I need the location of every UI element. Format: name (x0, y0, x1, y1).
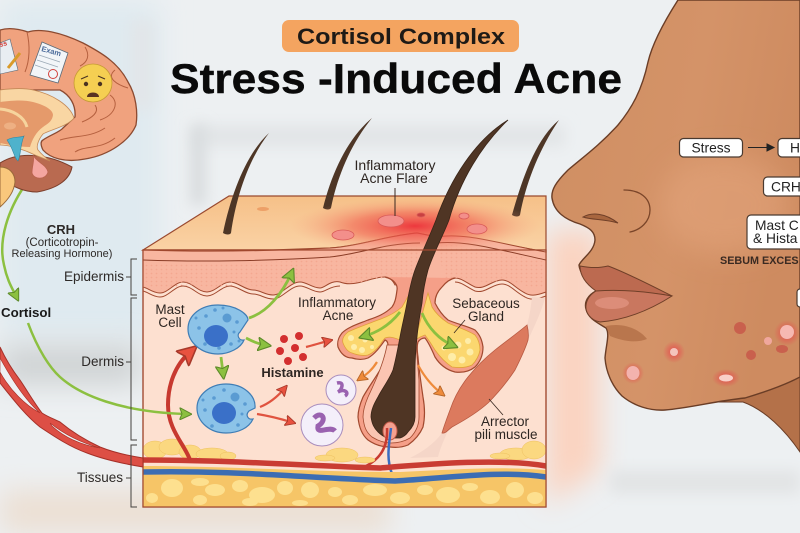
lips (580, 266, 672, 322)
follicle and sebaceous glands (338, 277, 483, 447)
blue vein (143, 472, 546, 481)
CRH label: CRH (47, 222, 75, 237)
cerebellum (0, 155, 72, 192)
arrector pili label: pili muscle (474, 427, 538, 442)
hair papilla and vessels (366, 422, 397, 474)
upper fat band (143, 439, 546, 463)
nostril (583, 214, 618, 223)
chin shadow (606, 325, 647, 341)
mast cell top (188, 305, 248, 354)
hypothalamus blue (7, 136, 24, 161)
mast cell bottom (197, 384, 255, 433)
side labels: Dermis (81, 354, 124, 369)
arrow: stress to next (748, 144, 774, 151)
epidermis layer (143, 233, 546, 295)
left gland fill (343, 293, 410, 355)
flare label: Inflammatory (355, 157, 435, 173)
gland lobules (348, 335, 474, 364)
muscle leader line (489, 399, 503, 415)
inflammatory acne label: Acne (323, 308, 353, 323)
stress box: Stress (691, 140, 731, 156)
face shape (552, 0, 800, 410)
side brackets (126, 259, 137, 507)
lower fat layer (143, 466, 546, 507)
branch vessel up to mast cell (168, 352, 190, 460)
dermal border second line (143, 282, 546, 299)
mast cell and histamine box: Mast C (755, 218, 799, 233)
flare label: Acne Flare (360, 170, 428, 186)
inner brain (0, 100, 53, 147)
muscle (410, 297, 545, 458)
face profile (552, 0, 800, 452)
worried face (74, 64, 112, 102)
subtitle pill (282, 20, 519, 52)
muscle belly (442, 325, 528, 433)
CRH label (12, 222, 112, 260)
cheek highlight (660, 155, 790, 255)
follicle sheath inner (363, 345, 419, 443)
stress box (680, 138, 742, 157)
neck shadow (700, 377, 800, 452)
arrector pili label (474, 414, 538, 442)
sebaceous gland label: Sebaceous (452, 296, 520, 311)
top face of skin (143, 196, 546, 252)
papers (0, 39, 68, 83)
skin cross-section (143, 118, 559, 507)
skin labels (155, 295, 538, 442)
cortisol label: Cortisol (1, 305, 51, 320)
top tendon (527, 297, 545, 340)
sebum excess label: SEBUM EXCES (720, 255, 799, 267)
gland leader line (454, 320, 465, 333)
mast cell label (155, 302, 185, 330)
orange arrows (361, 362, 441, 393)
pituitary (32, 155, 48, 178)
sebaceous gland label (452, 296, 520, 324)
brain folds (25, 32, 128, 152)
neutrophil large (301, 404, 343, 446)
brain outer (0, 29, 137, 160)
redness flare (290, 198, 540, 254)
red arrows (257, 341, 328, 422)
mast cell label: Cell (158, 315, 182, 330)
H box: H (790, 140, 800, 156)
cropped box (797, 289, 800, 307)
mast cell and histamine box: & Hista (753, 231, 798, 246)
histamine dots (276, 332, 307, 365)
H box (778, 138, 800, 157)
flare label (355, 157, 435, 186)
nose wing (624, 190, 650, 232)
CRH label: (Corticotropin- (26, 237, 99, 249)
mast cell label: Mast (155, 302, 185, 317)
CRH box (764, 177, 800, 196)
papers: Exam (40, 44, 62, 58)
top pimples (257, 207, 487, 240)
subtitle pill: Cortisol Complex (297, 24, 506, 49)
flare leader line (394, 188, 396, 216)
surface hairs (223, 118, 559, 234)
inflammatory acne label: Inflammatory (298, 295, 376, 310)
brainstem (0, 167, 15, 207)
thalamus oval (4, 122, 16, 130)
side labels: Epidermis (64, 269, 124, 284)
front face of skin (143, 250, 546, 507)
main hair and bulb (371, 120, 508, 438)
mast cell and histamine box (747, 215, 800, 249)
side labels: Tissues (77, 470, 123, 485)
side labels (64, 269, 124, 485)
acne spots (622, 320, 800, 387)
sebaceous gland label: Gland (468, 309, 504, 324)
brain (0, 29, 137, 207)
neutrophil small (326, 375, 356, 405)
green arrows (2, 185, 452, 414)
red artery in skin (143, 460, 546, 468)
CRH label: Releasing Hormone) (12, 248, 112, 260)
box re-outline (143, 250, 546, 507)
inflammatory acne label (298, 295, 376, 323)
left bands of blood vessel (0, 347, 143, 467)
epidermis inner line (143, 242, 546, 261)
arrector pili label: Arrector (481, 414, 530, 429)
thalamus (0, 109, 27, 127)
histamine label: Histamine (261, 365, 324, 380)
bottom tendon (410, 428, 449, 458)
epidermis texture (143, 245, 546, 289)
right gland fill (415, 293, 480, 368)
title: Stress -Induced Acne (170, 55, 622, 102)
corpus callosum (0, 88, 74, 161)
